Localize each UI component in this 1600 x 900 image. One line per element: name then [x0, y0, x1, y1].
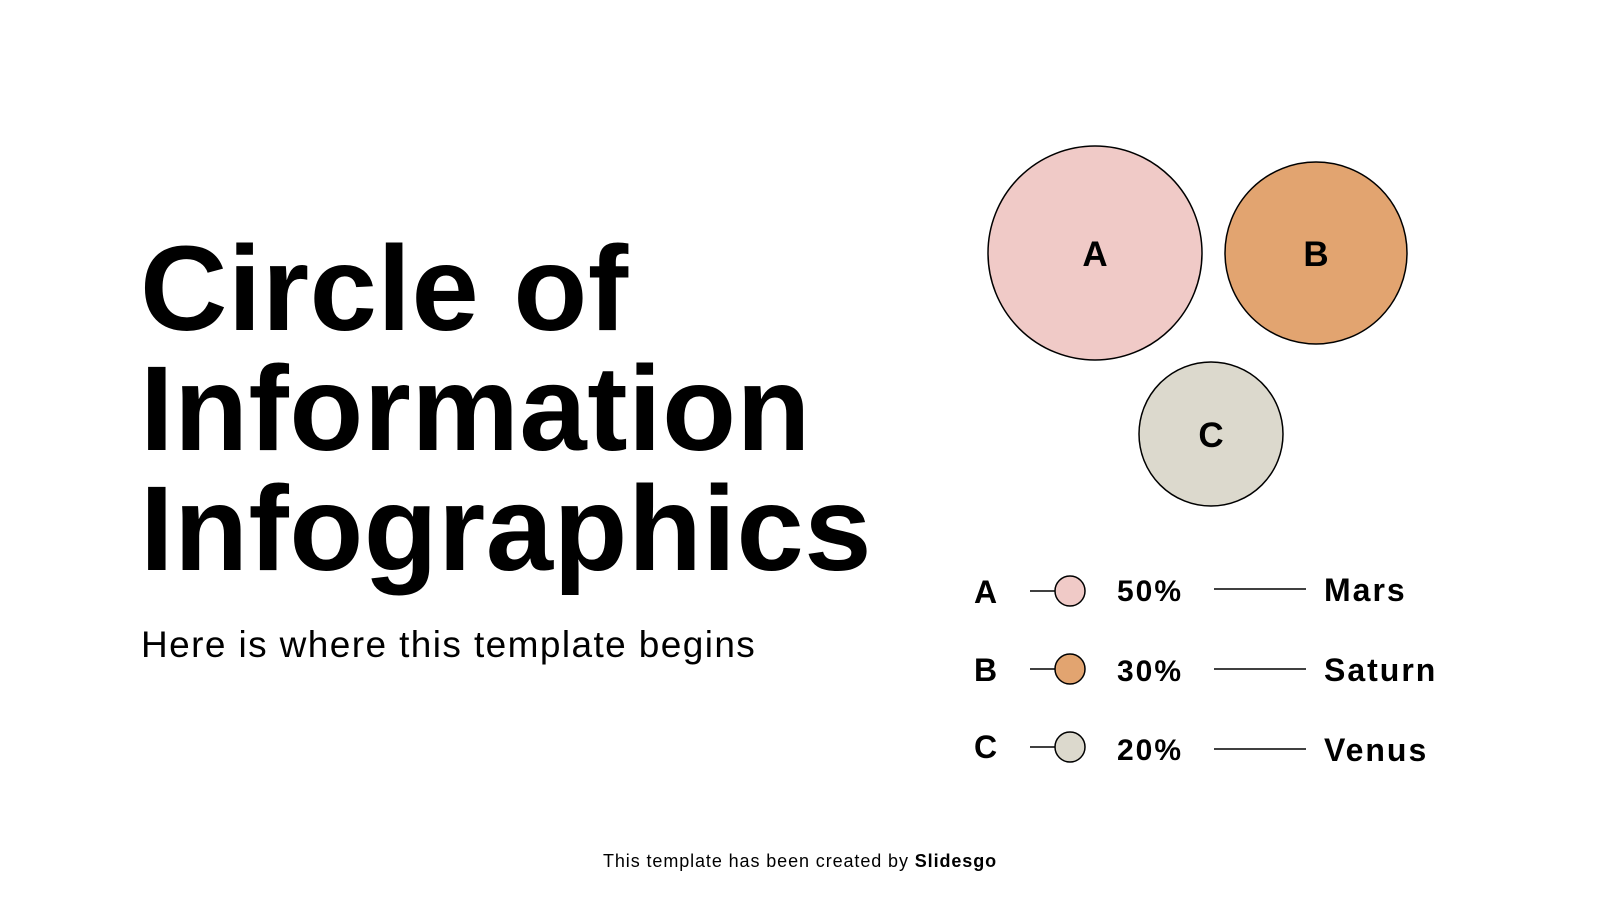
legend row C: C [974, 729, 999, 765]
title: Infographics [140, 460, 872, 596]
circle B: B [1303, 235, 1329, 274]
legend row C [974, 729, 1428, 768]
legend row B: Saturn [1324, 652, 1437, 688]
circle B [1225, 162, 1407, 344]
legend row A: Mars [1324, 572, 1407, 608]
subtitle: Here is where this template begins [141, 624, 756, 665]
circle C [1139, 362, 1283, 506]
legend row B: 30% [1117, 655, 1183, 688]
legend row A [974, 572, 1407, 610]
title: Information [140, 340, 811, 476]
title: Circle of [140, 220, 629, 356]
title [140, 220, 872, 596]
legend row A: A [974, 574, 999, 610]
legend row C: 20% [1117, 734, 1183, 767]
legend row A: 50% [1117, 575, 1183, 608]
legend row B: B [974, 652, 999, 688]
circle C: C [1198, 416, 1224, 455]
legend row B [974, 652, 1437, 688]
footer credit: This template has been created by Slidesgo [603, 851, 997, 871]
circle A [988, 146, 1202, 360]
legend row C: Venus [1324, 732, 1428, 768]
circle A: A [1082, 235, 1108, 274]
